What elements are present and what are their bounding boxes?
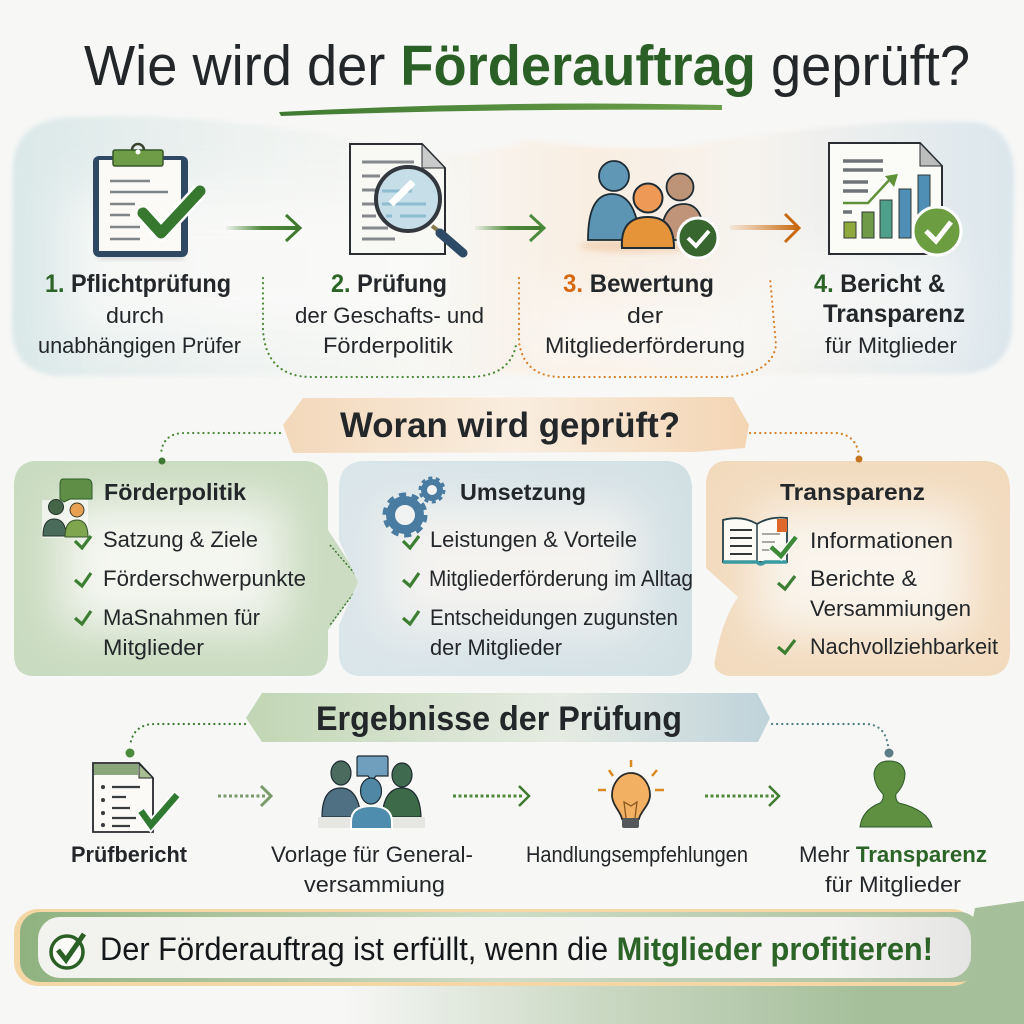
step 2 text <box>295 270 484 358</box>
footer banner <box>14 901 1024 1024</box>
connector right <box>750 433 862 462</box>
label: Prüfbericht: Prüfbericht <box>71 842 187 867</box>
panel: Förderpolitik <box>10 455 370 680</box>
icon: meeting group <box>318 756 425 829</box>
label: Handlungsempfehlungen: Handlungsempfehlungen <box>526 842 748 867</box>
icon: person silhouette <box>860 761 932 827</box>
checklist: Informationen <box>810 528 953 553</box>
connector left <box>158 433 280 464</box>
panel: Umsetzung: Umsetzung <box>460 479 586 505</box>
step 1 text: durch <box>106 303 164 328</box>
title: Wie wird der Förderauftrag geprüft? <box>84 34 970 98</box>
icon: gears <box>385 478 444 535</box>
label: Vorlage <box>271 842 473 897</box>
icon: people with check <box>580 161 718 258</box>
step 3 text: der <box>627 303 664 328</box>
step 4 text: Transparenz <box>823 300 965 328</box>
step 2 text: 2. Prüfung <box>331 270 447 298</box>
arrow 1 <box>226 215 300 241</box>
icon: people with speech bubble <box>42 479 92 538</box>
icon: document with magnifier <box>350 144 463 254</box>
label: Mehr Transparenz <box>799 842 987 897</box>
checklist: der Mitglieder <box>430 635 562 660</box>
arrow <box>218 786 271 806</box>
checklist: Berichte & <box>810 566 917 591</box>
heading: Woran wird geprüft: Woran wird geprüft? <box>340 406 680 445</box>
checklist: Mitglieder <box>103 635 205 660</box>
step 2 text: Förderpolitik <box>323 333 454 358</box>
panel: Transparenz: Transparenz <box>780 479 925 505</box>
checklist: Versammiungen <box>810 596 971 621</box>
checklist: Förderschwerpunkte <box>103 566 306 591</box>
panel: process steps <box>12 116 1014 377</box>
step 4 text: für Mitglieder <box>825 333 958 358</box>
icon: report chart with check <box>829 143 961 255</box>
step 3 text: Mitgliederförderung <box>545 333 745 358</box>
label: Mehr Transparenz: für Mitglieder <box>825 872 962 897</box>
heading: Woran wird geprüft <box>283 397 749 453</box>
heading: Ergebnisse der Prüfung <box>246 693 770 742</box>
checklist: Satzung & Ziele <box>103 527 258 552</box>
step 1 text: 1. Pflichtprüfung <box>45 270 231 298</box>
panel: Umsetzung <box>335 455 697 680</box>
checklist <box>75 527 306 660</box>
label: Vorlage: Vorlage für General- <box>271 842 473 867</box>
step 4 text <box>814 270 965 358</box>
checklist: MaSnahmen für <box>103 605 260 630</box>
label: Vorlage: versammiung <box>304 872 445 897</box>
icon: light bulb <box>598 760 664 828</box>
heading: Ergebnisse der Prüfung: Ergebnisse der Prüfung <box>316 700 682 738</box>
icon: open book <box>723 518 796 564</box>
icon: report check <box>93 763 177 832</box>
step 4 text: 4. Bericht & <box>814 270 945 298</box>
label: Mehr Transparenz: Mehr Transparenz <box>799 842 987 867</box>
step 1 text: unabhängigen Prüfer <box>38 333 241 358</box>
arrow 2 <box>475 215 544 241</box>
checklist <box>403 527 693 660</box>
step 3 text <box>545 270 745 358</box>
connector right results <box>772 724 894 758</box>
step 2 text: der Geschafts- und <box>295 303 484 328</box>
icon: clipboard with check <box>93 144 200 259</box>
panel: Transparenz <box>700 455 1015 680</box>
arrow 3 <box>730 214 799 242</box>
footer banner: Der Förderauftrag ist erfüllt, wenn die Mitglieder profitieren! <box>100 931 933 967</box>
checklist: Leistungen & Vorteile <box>430 527 637 552</box>
checklist <box>778 528 999 659</box>
step 3 text: 3. Bewertung <box>563 270 714 298</box>
arrow <box>705 786 779 806</box>
icon: check circle <box>51 934 84 968</box>
panel: Förderpolitik: Förderpolitik <box>104 479 247 505</box>
arrow <box>453 786 529 806</box>
step 1 text <box>38 270 241 358</box>
connector left results <box>126 724 245 758</box>
checklist: Nachvollziehbarkeit <box>810 634 999 659</box>
checklist: Entscheidungen zugunsten <box>430 605 678 630</box>
checklist: Mitgliederförderung im Alltag <box>429 566 693 591</box>
dotted connectors <box>263 278 776 377</box>
